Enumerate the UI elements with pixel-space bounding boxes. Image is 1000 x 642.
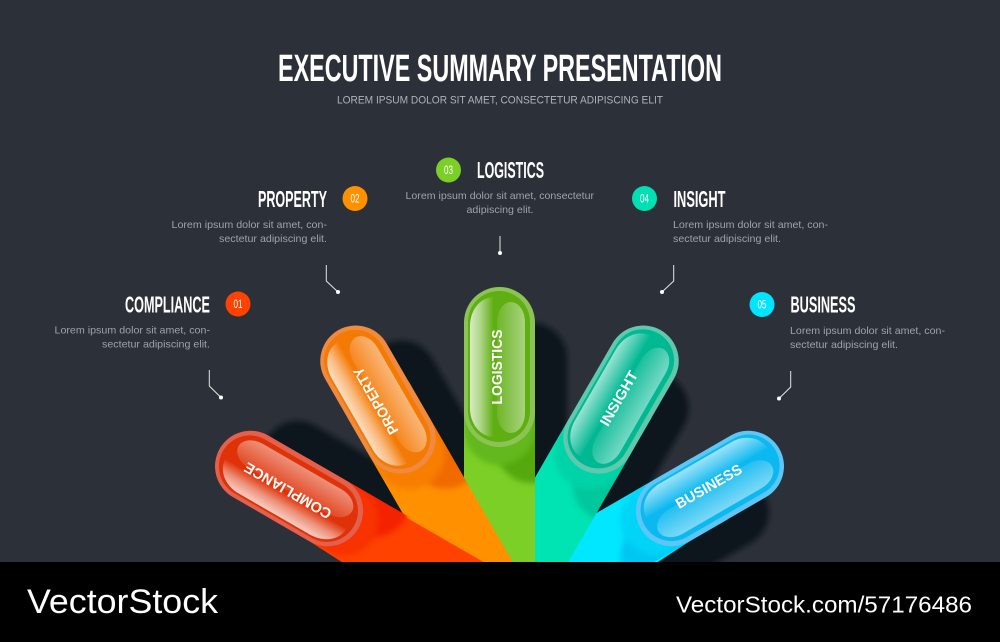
- label block: property: sectetur adipiscing elit.: [219, 234, 327, 245]
- title: EXECUTIVE SUMMARY PRESENTATION: [278, 48, 722, 90]
- fan blade: logistics: LOGISTICS: [490, 329, 506, 404]
- fan blade: compliance: [215, 430, 484, 562]
- label block: insight: Lorem ipsum dolor sit amet, con-: [673, 220, 828, 231]
- label block: compliance: sectetur adipiscing elit.: [102, 340, 210, 350]
- subtitle: LOREM IPSUM DOLOR SIT AMET, CONSECTETUR ADIPISCING ELIT: [337, 94, 663, 106]
- connector: property: [326, 265, 340, 294]
- label block: compliance: 01: [234, 297, 243, 311]
- footer bar: [0, 562, 1000, 642]
- label block: property: PROPERTY: [258, 186, 327, 212]
- label block: logistics: LOGISTICS: [477, 157, 544, 183]
- label block: property: 02: [350, 192, 360, 206]
- connector: insight: [660, 265, 674, 294]
- fan blade: business: BUSINESS: [673, 462, 746, 513]
- fan blade: insight: INSIGHT: [598, 368, 642, 429]
- footer bar: VectorStock: [27, 583, 219, 621]
- label block: compliance: [54, 292, 250, 350]
- label block: compliance: Lorem ipsum dolor sit amet, con-: [54, 326, 210, 337]
- connector: business: [777, 371, 791, 400]
- connector: logistics: [498, 236, 502, 255]
- fan blade: compliance: COMPLIANCE: [242, 458, 335, 521]
- label block: insight: INSIGHT: [674, 186, 726, 212]
- label block: insight: 04: [640, 192, 649, 206]
- cast shadows behind the fan: [249, 323, 782, 605]
- label block: business: BUSINESS: [790, 292, 856, 318]
- fan blade: logistics: [464, 287, 535, 562]
- label block: logistics: [406, 157, 595, 216]
- label block: insight: [632, 186, 828, 245]
- fan blade: property: [320, 326, 513, 562]
- label block: business: Lorem ipsum dolor sit amet, con-: [790, 326, 945, 337]
- label block: compliance: COMPLIANCE: [125, 292, 210, 318]
- label block: logistics: Lorem ipsum dolor sit amet, consectetur: [406, 191, 595, 202]
- label block: property: [172, 186, 368, 245]
- label block: business: [750, 292, 945, 351]
- label block: insight: sectetur adipiscing elit.: [673, 234, 781, 245]
- connector: compliance: [209, 370, 223, 400]
- footer bar: VectorStock.com/57176486: [676, 592, 972, 618]
- label block: logistics: adipiscing elit.: [466, 205, 534, 216]
- label block: business: sectetur adipiscing elit.: [790, 340, 898, 351]
- fan blade: insight: [535, 326, 679, 562]
- label block: business: 05: [758, 298, 767, 312]
- label block: logistics: 03: [444, 163, 453, 177]
- label block: property: Lorem ipsum dolor sit amet, con-: [172, 220, 327, 231]
- fan blade: property: PROPERTY: [351, 364, 402, 437]
- fan blade: business: [568, 430, 784, 562]
